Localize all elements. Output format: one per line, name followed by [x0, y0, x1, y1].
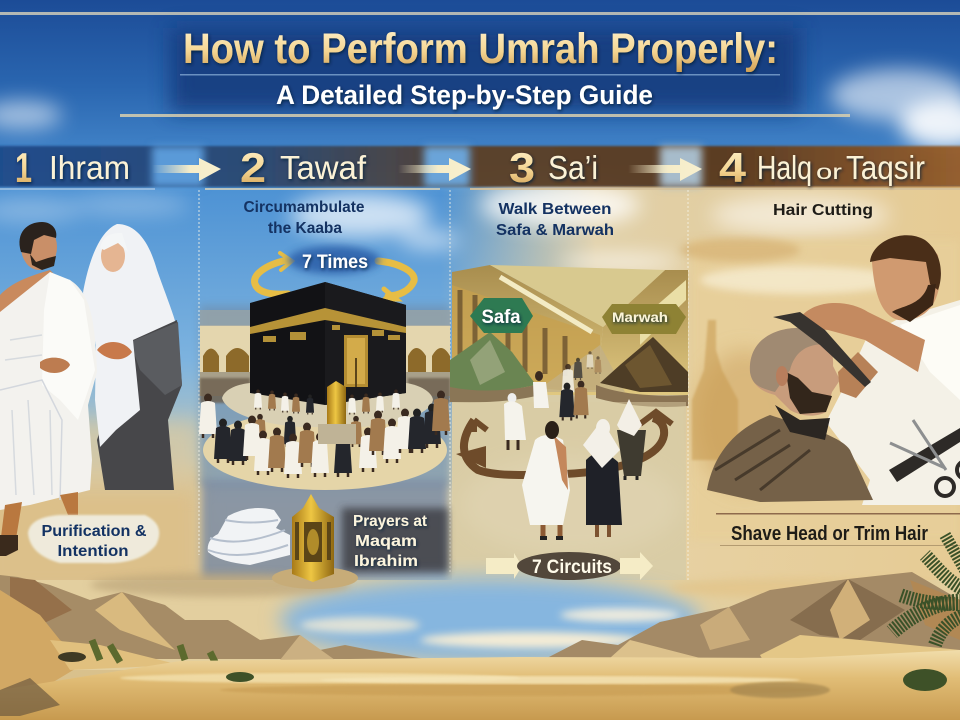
step 3 label: Sa’i	[548, 149, 598, 186]
panel 3 backdrop	[452, 395, 686, 585]
label: purification and intention	[28, 515, 159, 563]
step 4 label	[719, 144, 925, 191]
panel 1 backdrop: sand ground	[0, 420, 202, 595]
seven times label	[288, 246, 380, 274]
clouds	[0, 69, 960, 282]
Marwah hill	[596, 337, 688, 407]
title heading: How to Perform Umrah Properly:	[183, 25, 778, 73]
panel 4 backdrop	[680, 238, 960, 540]
step 2 label: Tawaf	[280, 149, 367, 186]
sandy foreground	[0, 650, 960, 720]
step 2 label: 2	[240, 144, 266, 191]
circuit arrows on the floor	[456, 412, 672, 475]
subtitle: A Detailed Step-by-Step Guide	[276, 80, 653, 110]
step 2 label	[240, 144, 367, 191]
lower sky patch	[0, 573, 960, 670]
folded ihram towels	[208, 508, 290, 565]
shave head caption: Shave Head or Trim Hair	[731, 523, 928, 545]
seven circuits pill: 7 Circuits	[532, 557, 612, 578]
step 3 label	[509, 144, 598, 191]
seated man having head shaved	[707, 328, 873, 502]
prayers at Maqam Ibrahim label: Maqam	[355, 533, 417, 550]
woman far right	[617, 399, 646, 480]
label: purification and intention: Intention	[58, 543, 128, 560]
arrow 2 to 3	[398, 158, 471, 181]
panel: step 2 caption: Circumambulate	[244, 199, 365, 216]
prayers at Maqam Ibrahim label: Ibrahim	[354, 553, 418, 570]
warm sand wash toward the right	[440, 186, 960, 596]
marble ring and side crowd	[200, 378, 450, 427]
prayers at Maqam Ibrahim label: Prayers at	[353, 513, 428, 530]
icon: golden Maqam lantern	[272, 494, 358, 589]
step 3 label: 3	[509, 144, 535, 191]
man in ihram	[0, 222, 97, 556]
scissors and comb	[889, 420, 960, 496]
pilgrim in white left	[504, 393, 526, 450]
Marwah sign	[602, 304, 686, 334]
seven circuits pill	[486, 552, 653, 580]
seven times label: 7 Times	[302, 252, 368, 273]
step 4 label: 4	[719, 144, 747, 191]
woman seen from behind	[583, 419, 622, 537]
arrow 1 to 2	[152, 158, 221, 181]
panel dividers	[199, 190, 688, 580]
title banner	[0, 12, 960, 117]
panel: step 3 caption line 2: Safa & Marwah	[496, 222, 614, 239]
panel 2 backdrop	[200, 305, 450, 580]
barber in white	[826, 235, 960, 505]
small pilgrims at the Kaaba base	[254, 389, 400, 414]
Safa hill	[450, 332, 536, 402]
arrow 3 to 4	[628, 158, 702, 181]
woman in white hijab	[83, 224, 182, 490]
pilgrims walking on sa'i	[504, 371, 646, 538]
Safa sign: Safa	[482, 307, 521, 328]
step 4 label: Halq	[757, 149, 812, 186]
palm tree fronds	[892, 535, 960, 645]
hair clipper	[773, 312, 871, 387]
sa'i corridor	[452, 265, 688, 395]
step 1 label: Ihram	[49, 149, 130, 186]
man in ihram seen from behind	[522, 421, 570, 538]
Safa sign	[470, 298, 533, 333]
Maqam Ibrahim small shrine	[318, 381, 356, 444]
step header band	[0, 144, 960, 191]
step 1 label	[15, 144, 130, 191]
sa'i walking floor	[453, 402, 686, 560]
label: purification and intention: Purification &	[42, 523, 147, 540]
left mountains	[0, 575, 425, 690]
right mountains	[545, 572, 960, 690]
step 4 label: or	[816, 161, 842, 184]
barber arms	[800, 303, 925, 398]
crowd of pilgrims	[199, 390, 450, 478]
step 1 label: 1	[15, 144, 32, 191]
colonnade behind the Kaaba	[200, 310, 450, 396]
distant mosque silhouette	[692, 320, 738, 460]
Kaaba	[250, 282, 406, 405]
Marwah sign: Marwah	[612, 309, 668, 325]
prayers at Maqam Ibrahim label	[342, 508, 448, 572]
panel: step 3 caption: Walk Between	[498, 201, 612, 218]
tawaf circling arrows	[255, 253, 414, 299]
panel: step 1 pilgrims	[0, 222, 182, 556]
step 4 label: Taqsir	[846, 149, 925, 186]
panel: step 2 caption line 2: the Kaaba	[268, 220, 342, 237]
panel: step 4 caption: Hair Cutting	[773, 202, 873, 219]
